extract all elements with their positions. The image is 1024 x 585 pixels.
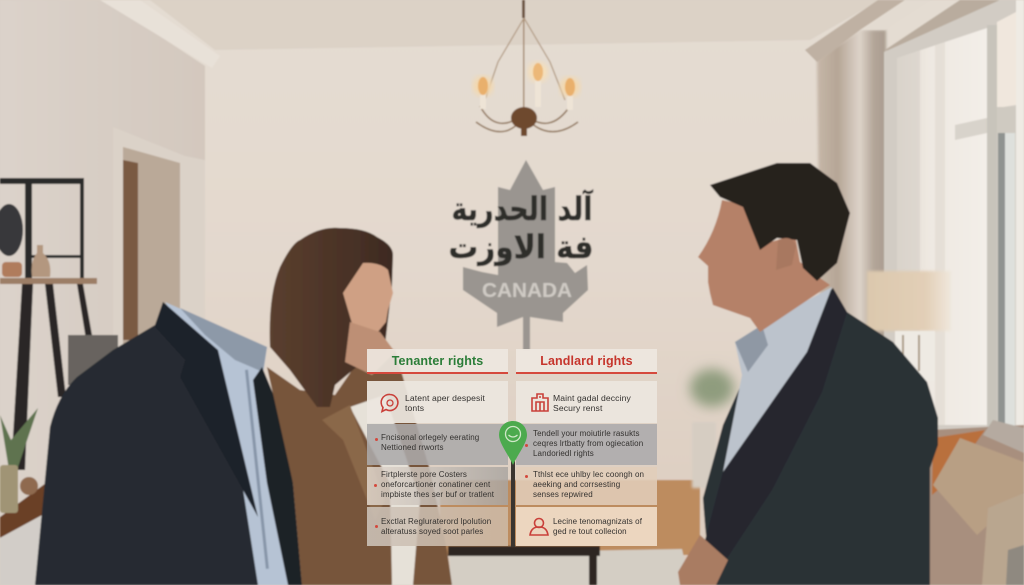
landlord row 3: aeeking and corrsesting bbox=[533, 480, 620, 489]
tenant row 2: Nettioned rrworts bbox=[381, 443, 444, 452]
tenant row 2: Fncisonal orlegely eerating bbox=[381, 433, 479, 442]
tenant row 2 bbox=[367, 424, 508, 465]
rights table bbox=[367, 349, 657, 547]
left figure: headless suit bbox=[35, 302, 302, 585]
landlord row 3: senses repwired bbox=[533, 490, 593, 499]
icon: person bbox=[529, 518, 549, 536]
woman bbox=[267, 228, 452, 585]
right man bbox=[678, 163, 938, 585]
maple leaf logo bbox=[448, 160, 594, 350]
tenant row 3 bbox=[367, 467, 508, 505]
rug bbox=[450, 549, 690, 585]
landlord row 4 bbox=[516, 507, 657, 546]
tenant row 1: Latent aper despesit bbox=[405, 393, 485, 403]
sofa bbox=[930, 420, 1024, 585]
ceiling trim right bbox=[805, 0, 905, 62]
floor bbox=[440, 480, 700, 555]
shelf bbox=[0, 178, 118, 470]
tenant row 4: Exctlat Regluraterord lpolution bbox=[381, 517, 491, 526]
landlord row 2: Tendell your moiutirle rasukts bbox=[533, 429, 640, 438]
tenant row 4: alteratuss soyed soot parles bbox=[381, 527, 483, 536]
landlord row 3 bbox=[516, 467, 657, 505]
curtain bbox=[817, 30, 886, 420]
tenant row 4 bbox=[367, 507, 508, 546]
maple leaf logo: CANADA bbox=[482, 280, 572, 302]
landlord row 1: Maint gadal decciny bbox=[553, 393, 631, 403]
icon: speech bubble bbox=[380, 394, 399, 413]
cabinet and potted plant bbox=[0, 408, 46, 585]
landlord row 2 bbox=[516, 424, 657, 465]
plant bbox=[690, 369, 734, 488]
landlord row 4: Lecine tenomagnizats of bbox=[553, 517, 642, 526]
tenant row 3: oneforcartioner conatiner cent bbox=[381, 480, 490, 489]
tenant row 3: impbiste thes ser buf or tratlent bbox=[381, 490, 494, 499]
landlord row 2: Landoriedl rights bbox=[533, 449, 594, 458]
icon: green map pin bbox=[499, 421, 527, 465]
window bbox=[884, 0, 1024, 430]
floor lamp bbox=[867, 271, 951, 381]
landlord row 3: Tthlst ece uhlby lec coongh on bbox=[533, 470, 644, 479]
landlord row 2: ceqres lrtbatty from ogiecation bbox=[533, 439, 643, 448]
landlord row 1: Secury renst bbox=[553, 403, 602, 413]
heading: tenant rights bbox=[367, 349, 508, 374]
heading: landlord rights: Landlard rights bbox=[540, 354, 633, 368]
table bbox=[448, 546, 600, 585]
left wall bbox=[0, 0, 205, 585]
ceiling bbox=[150, 0, 880, 50]
chandelier bbox=[473, 0, 580, 136]
cornice bbox=[100, 0, 220, 68]
doorway bbox=[113, 127, 205, 420]
icon: building bbox=[531, 393, 549, 412]
tenant row 1: tonts bbox=[405, 403, 424, 413]
maple leaf logo: فة الاوزت bbox=[448, 228, 594, 266]
heading: landlord rights bbox=[516, 349, 657, 374]
landlord row 1 bbox=[516, 381, 657, 423]
maple leaf logo: آلد الحدرية bbox=[452, 189, 593, 228]
tenant row 1 bbox=[367, 381, 508, 423]
tenant row 3: Firtplerste pore Costers bbox=[381, 470, 467, 479]
heading: tenant rights: Tenanter rights bbox=[392, 354, 483, 368]
centre post bbox=[511, 461, 515, 547]
landlord row 4: ged re tout collecion bbox=[553, 527, 627, 536]
